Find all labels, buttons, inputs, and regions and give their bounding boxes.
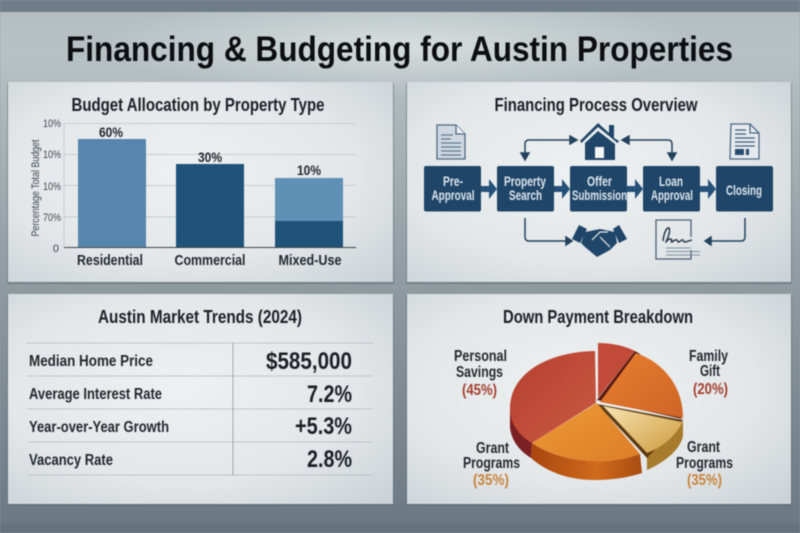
title: Financing & Budgeting for Austin Properties xyxy=(66,30,733,69)
label: grant programs right: Programs xyxy=(676,455,733,472)
step: offer submission: Submission xyxy=(572,188,627,203)
icon: house xyxy=(580,123,619,160)
icon: document left xyxy=(437,125,465,159)
label: family gift: Family xyxy=(689,348,728,365)
panel: budget allocation xyxy=(7,82,394,284)
label: grant programs left: (35%) xyxy=(473,472,509,489)
icon: handshake xyxy=(572,225,627,257)
bar chart: 10% xyxy=(297,162,321,178)
connector arrows between steps xyxy=(481,179,716,199)
step: loan approval: Loan xyxy=(659,174,683,189)
step: closing xyxy=(716,166,773,212)
bar chart: 70% xyxy=(43,212,61,224)
table: +5.3% xyxy=(295,413,352,440)
label: personal savings: Savings xyxy=(456,364,503,381)
arrow: house to approval xyxy=(622,136,676,160)
bar chart xyxy=(30,118,356,269)
step: pre-approval: Approval xyxy=(432,188,474,203)
label: personal savings: Personal xyxy=(454,348,507,365)
bar chart: 10% xyxy=(43,149,61,161)
step: offer submission xyxy=(570,166,627,212)
label: grant programs right: (35%) xyxy=(687,472,722,489)
step: property search: Property xyxy=(504,174,546,189)
step: offer submission: Offer xyxy=(587,174,613,189)
label: family gift: Gift xyxy=(700,363,720,380)
icon: signed contract xyxy=(656,220,700,259)
label: grant programs right: Grant xyxy=(687,439,720,456)
label: grant programs right xyxy=(676,439,733,489)
bar chart: Mixed-Use xyxy=(278,252,342,269)
pie chart xyxy=(510,343,683,480)
label: grant programs left: Grant xyxy=(476,440,509,457)
table: 2.8% xyxy=(307,446,352,473)
panel: market trends xyxy=(7,294,394,506)
bar chart: 60% xyxy=(99,124,123,140)
arrow: search to house xyxy=(521,136,577,160)
arrow: closing to contract xyxy=(705,218,745,245)
table: Median Home Price xyxy=(29,353,153,370)
table: 7.2% xyxy=(307,381,352,408)
label: personal savings: (45%) xyxy=(462,382,497,399)
table xyxy=(27,343,373,475)
step: loan approval: Approval xyxy=(651,188,693,203)
background glow xyxy=(100,0,700,95)
bar chart: 0 xyxy=(53,243,59,255)
heading: down payment: Down Payment Breakdown xyxy=(503,306,693,327)
table: $585,000 xyxy=(266,348,352,375)
panel: financing process xyxy=(406,82,792,284)
label: family gift: (20%) xyxy=(693,381,728,398)
label: personal savings xyxy=(454,348,507,399)
bar chart: Percentage Total Budget xyxy=(30,140,42,236)
heading: budget allocation: Budget Allocation by Property Type xyxy=(72,94,324,115)
arrow: search to handshake xyxy=(525,218,572,245)
bar chart: 10% xyxy=(43,118,61,130)
step: property search: Search xyxy=(509,188,542,203)
table: Year-over-Year Growth xyxy=(29,419,169,436)
icon: document right xyxy=(730,124,759,159)
step: pre-approval: Pre- xyxy=(443,174,463,189)
step: pre-approval xyxy=(424,166,481,212)
bottom band xyxy=(0,524,800,533)
label: grant programs left xyxy=(463,440,520,489)
bar chart: Commercial xyxy=(174,252,246,269)
bar chart: 10% xyxy=(43,181,61,193)
table: Average Interest Rate xyxy=(29,386,162,403)
bar chart: Residential xyxy=(77,252,143,269)
step: loan approval xyxy=(643,166,700,212)
step: property search xyxy=(497,166,554,212)
label: grant programs left: Programs xyxy=(463,455,520,472)
bar chart: 30% xyxy=(198,149,222,165)
heading: market trends: Austin Market Trends (2024) xyxy=(98,306,302,327)
table: Vacancy Rate xyxy=(29,452,113,469)
heading: financing process: Financing Process Overview xyxy=(494,94,698,115)
step: closing: Closing xyxy=(726,183,762,198)
panel: down payment xyxy=(406,294,792,506)
top band xyxy=(0,0,800,12)
label: family gift xyxy=(689,348,728,398)
